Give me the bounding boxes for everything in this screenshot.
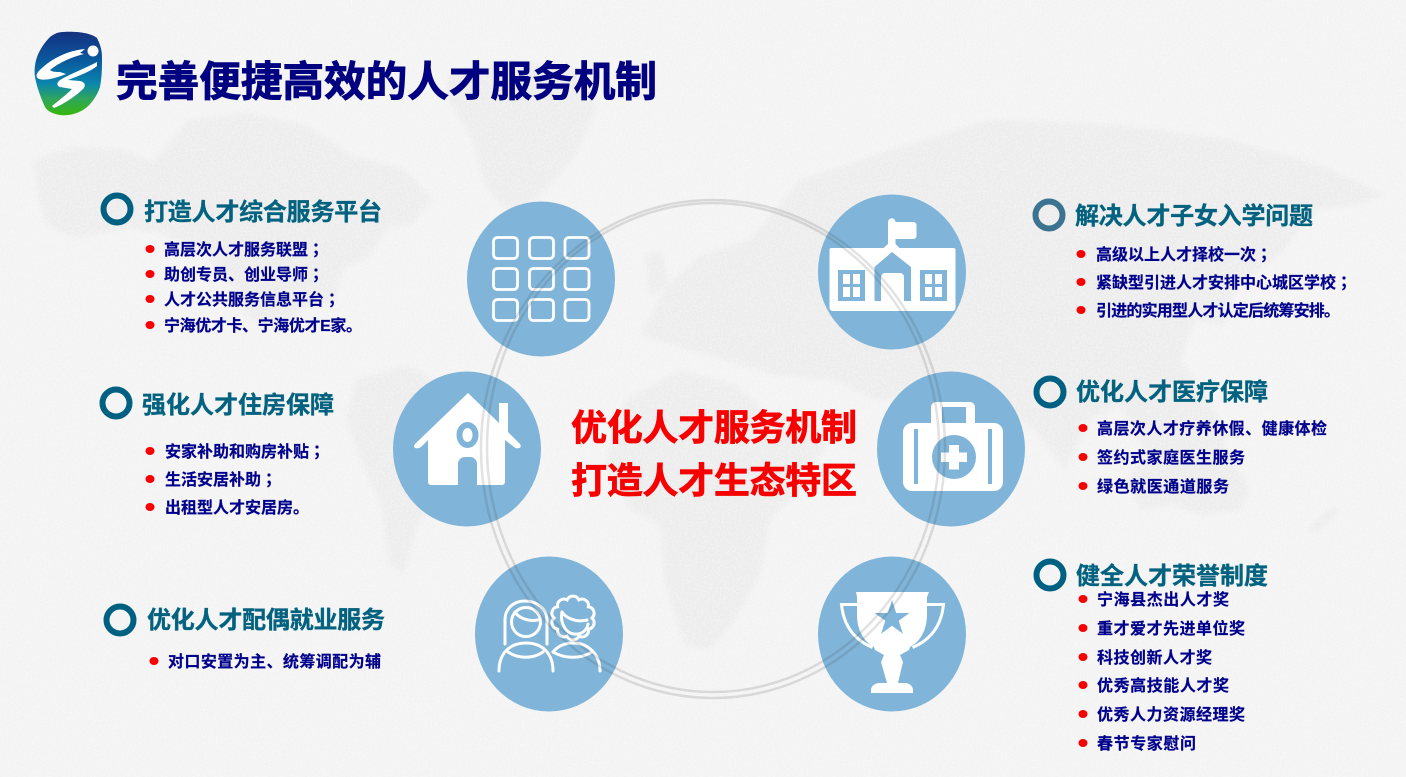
panel: honours bbox=[1036, 562, 1268, 753]
icon: service grid bbox=[467, 202, 615, 356]
list: honours bbox=[1078, 590, 1245, 753]
central ring bbox=[481, 200, 945, 698]
list: platform bbox=[146, 236, 362, 335]
heading: honours: 健全人才荣誉制度 bbox=[1076, 563, 1268, 590]
ring bullet: education bbox=[1036, 202, 1062, 228]
list: housing bbox=[146, 438, 325, 517]
icon: school bbox=[818, 194, 966, 350]
list: spouse: 对口安置为主、统筹调配为辅 bbox=[168, 652, 381, 671]
list: honours: 春节专家慰问 bbox=[1097, 734, 1196, 753]
heading: housing: 强化人才住房保障 bbox=[142, 392, 334, 419]
list: honours: 宁海县杰出人才奖 bbox=[1097, 590, 1229, 609]
list: education: 引进的实用型人才认定后统筹安排。 bbox=[1096, 301, 1340, 320]
list: housing: 出租型人才安居房。 bbox=[165, 498, 309, 517]
logo bbox=[35, 32, 102, 115]
list: housing: 安家补助和购房补贴； bbox=[165, 438, 325, 462]
list: honours: 重才爱才先进单位奖 bbox=[1097, 619, 1245, 638]
list: medical: 签约式家庭医生服务 bbox=[1097, 448, 1245, 467]
list: education bbox=[1076, 241, 1352, 320]
list: education: 紧缺型引进人才安排中心城区学校； bbox=[1096, 269, 1352, 293]
list: medical bbox=[1078, 419, 1327, 496]
heading: education: 解决人才子女入学问题 bbox=[1075, 203, 1313, 230]
panel: spouse employment bbox=[106, 606, 385, 671]
heading: medical: 优化人才医疗保障 bbox=[1076, 379, 1268, 406]
list: platform: 人才公共服务信息平台； bbox=[164, 286, 340, 310]
list: honours: 科技创新人才奖 bbox=[1097, 648, 1212, 667]
list: platform: 助创专员、创业导师； bbox=[164, 261, 324, 285]
list: medical: 绿色就医通道服务 bbox=[1097, 477, 1229, 496]
panel: housing bbox=[102, 390, 334, 517]
heading: spouse: 优化人才配偶就业服务 bbox=[147, 607, 385, 634]
panel: medical bbox=[1036, 378, 1327, 496]
ring bullet: platform bbox=[104, 196, 130, 222]
title: 完善便捷高效的人才服务机制 bbox=[116, 58, 657, 105]
ring bullet: honours bbox=[1036, 562, 1064, 588]
icon: trophy bbox=[818, 556, 966, 712]
ring bullet: medical bbox=[1036, 378, 1064, 406]
icon: couple bbox=[475, 556, 623, 712]
ring bullet: housing bbox=[102, 390, 130, 416]
list: honours: 优秀高技能人才奖 bbox=[1097, 676, 1229, 695]
central message: 优化人才服务机制 bbox=[571, 407, 857, 448]
heading: platform: 打造人才综合服务平台 bbox=[144, 198, 382, 226]
icon: house bbox=[393, 372, 541, 526]
list: platform: 宁海优才卡、宁海优才E家。 bbox=[164, 316, 362, 335]
central message bbox=[571, 407, 857, 501]
list: housing: 生活安居补助； bbox=[165, 466, 277, 490]
list: medical: 高层次人才疗养休假、健康体检 bbox=[1097, 419, 1327, 438]
central message: 打造人才生态特区 bbox=[571, 460, 857, 501]
list: honours: 优秀人力资源经理奖 bbox=[1097, 705, 1245, 724]
icon: first-aid case bbox=[877, 372, 1025, 526]
list: education: 高级以上人才择校一次； bbox=[1096, 241, 1272, 265]
ring bullet: spouse bbox=[106, 606, 134, 634]
list: platform: 高层次人才服务联盟； bbox=[164, 236, 324, 260]
panel: children education bbox=[1036, 202, 1352, 320]
panel: talent service platform bbox=[104, 196, 382, 335]
